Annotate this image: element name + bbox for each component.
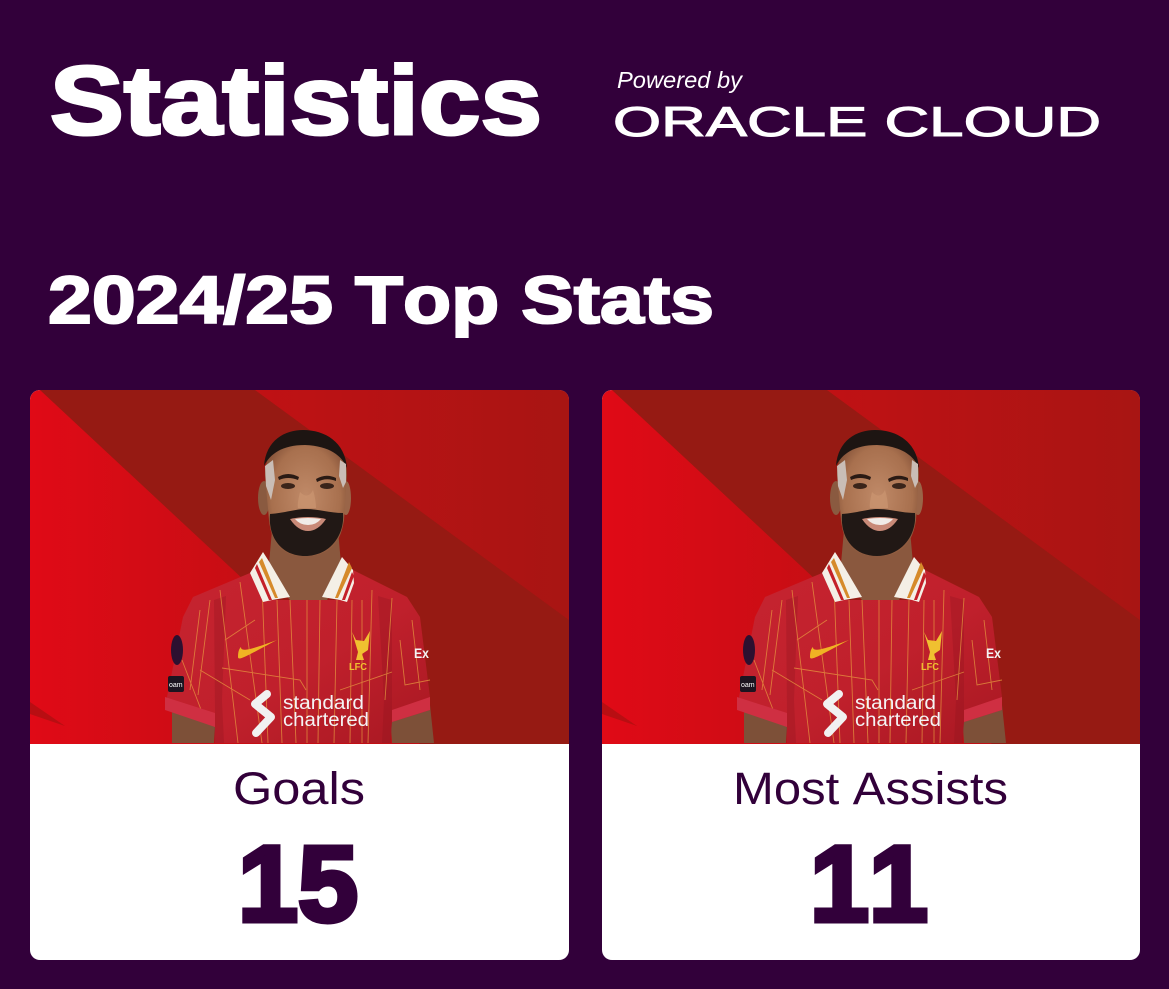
brows [850,474,908,482]
smile [862,517,898,531]
stat label: Most Assists [733,763,1008,814]
stat value: 11 [810,823,928,944]
beard [270,509,343,556]
section heading: 2024/25 Top Stats [48,263,714,338]
hair [264,430,347,468]
nose [870,490,888,508]
panel: goals card [30,390,569,960]
ears [830,481,842,515]
shirt [165,570,430,743]
temple highlights [837,460,918,500]
sponsor logo: standard [283,693,364,714]
player photo illustration [165,430,434,743]
sleeve sponsor: Ex [986,645,1001,661]
sleeve badge: oam [741,682,755,689]
beard [842,509,915,556]
sponsor logo: Powered by Oracle Cloud [613,67,1101,145]
collar [250,552,354,602]
stat label: Goals [233,763,365,814]
sponsor logo: standard [855,693,936,714]
sleeve badge: oam [169,682,183,689]
cuffs [737,697,1002,727]
nose [298,490,316,508]
shirt pinstripes [754,582,1002,743]
eyes [281,483,295,489]
sponsor logo [255,693,369,733]
sleeve shading [786,596,964,743]
smile [290,517,326,531]
sleeve badge [168,635,184,692]
neck [268,530,342,600]
face [265,438,347,556]
club crest [349,631,370,673]
sleeve sponsor: Ex [414,645,429,661]
sponsor logo: Powered by Oracle Cloud: Powered by [617,67,744,93]
red patterned header [30,390,569,744]
sleeve shading [214,596,392,743]
sponsor logo: chartered [855,710,941,731]
shirt pinstripes [182,582,430,743]
club crest [921,631,942,673]
neck [840,530,914,600]
card background [30,390,569,960]
card background [602,390,1140,960]
arms [172,705,434,743]
sponsor logo [827,693,941,733]
stat value: 15 [238,823,358,944]
hair [836,430,919,468]
sponsor logo: chartered [283,710,369,731]
temple highlights [265,460,346,500]
brows [278,474,336,482]
shirt [737,570,1002,743]
cuffs [165,697,430,727]
nike swoosh [810,640,849,658]
player photo illustration [737,430,1006,743]
nike swoosh [238,640,277,658]
face [837,438,919,556]
title: Statistics [50,46,542,155]
eyes [853,483,867,489]
red patterned header [602,390,1140,744]
club crest: LFC [349,662,367,673]
ears [258,481,270,515]
sponsor logo: Powered by Oracle Cloud: ORACLE CLOUD [613,98,1101,145]
arms [744,705,1006,743]
panel: assists card [602,390,1140,960]
sleeve badge [740,635,756,692]
club crest: LFC [921,662,939,673]
collar [822,552,926,602]
